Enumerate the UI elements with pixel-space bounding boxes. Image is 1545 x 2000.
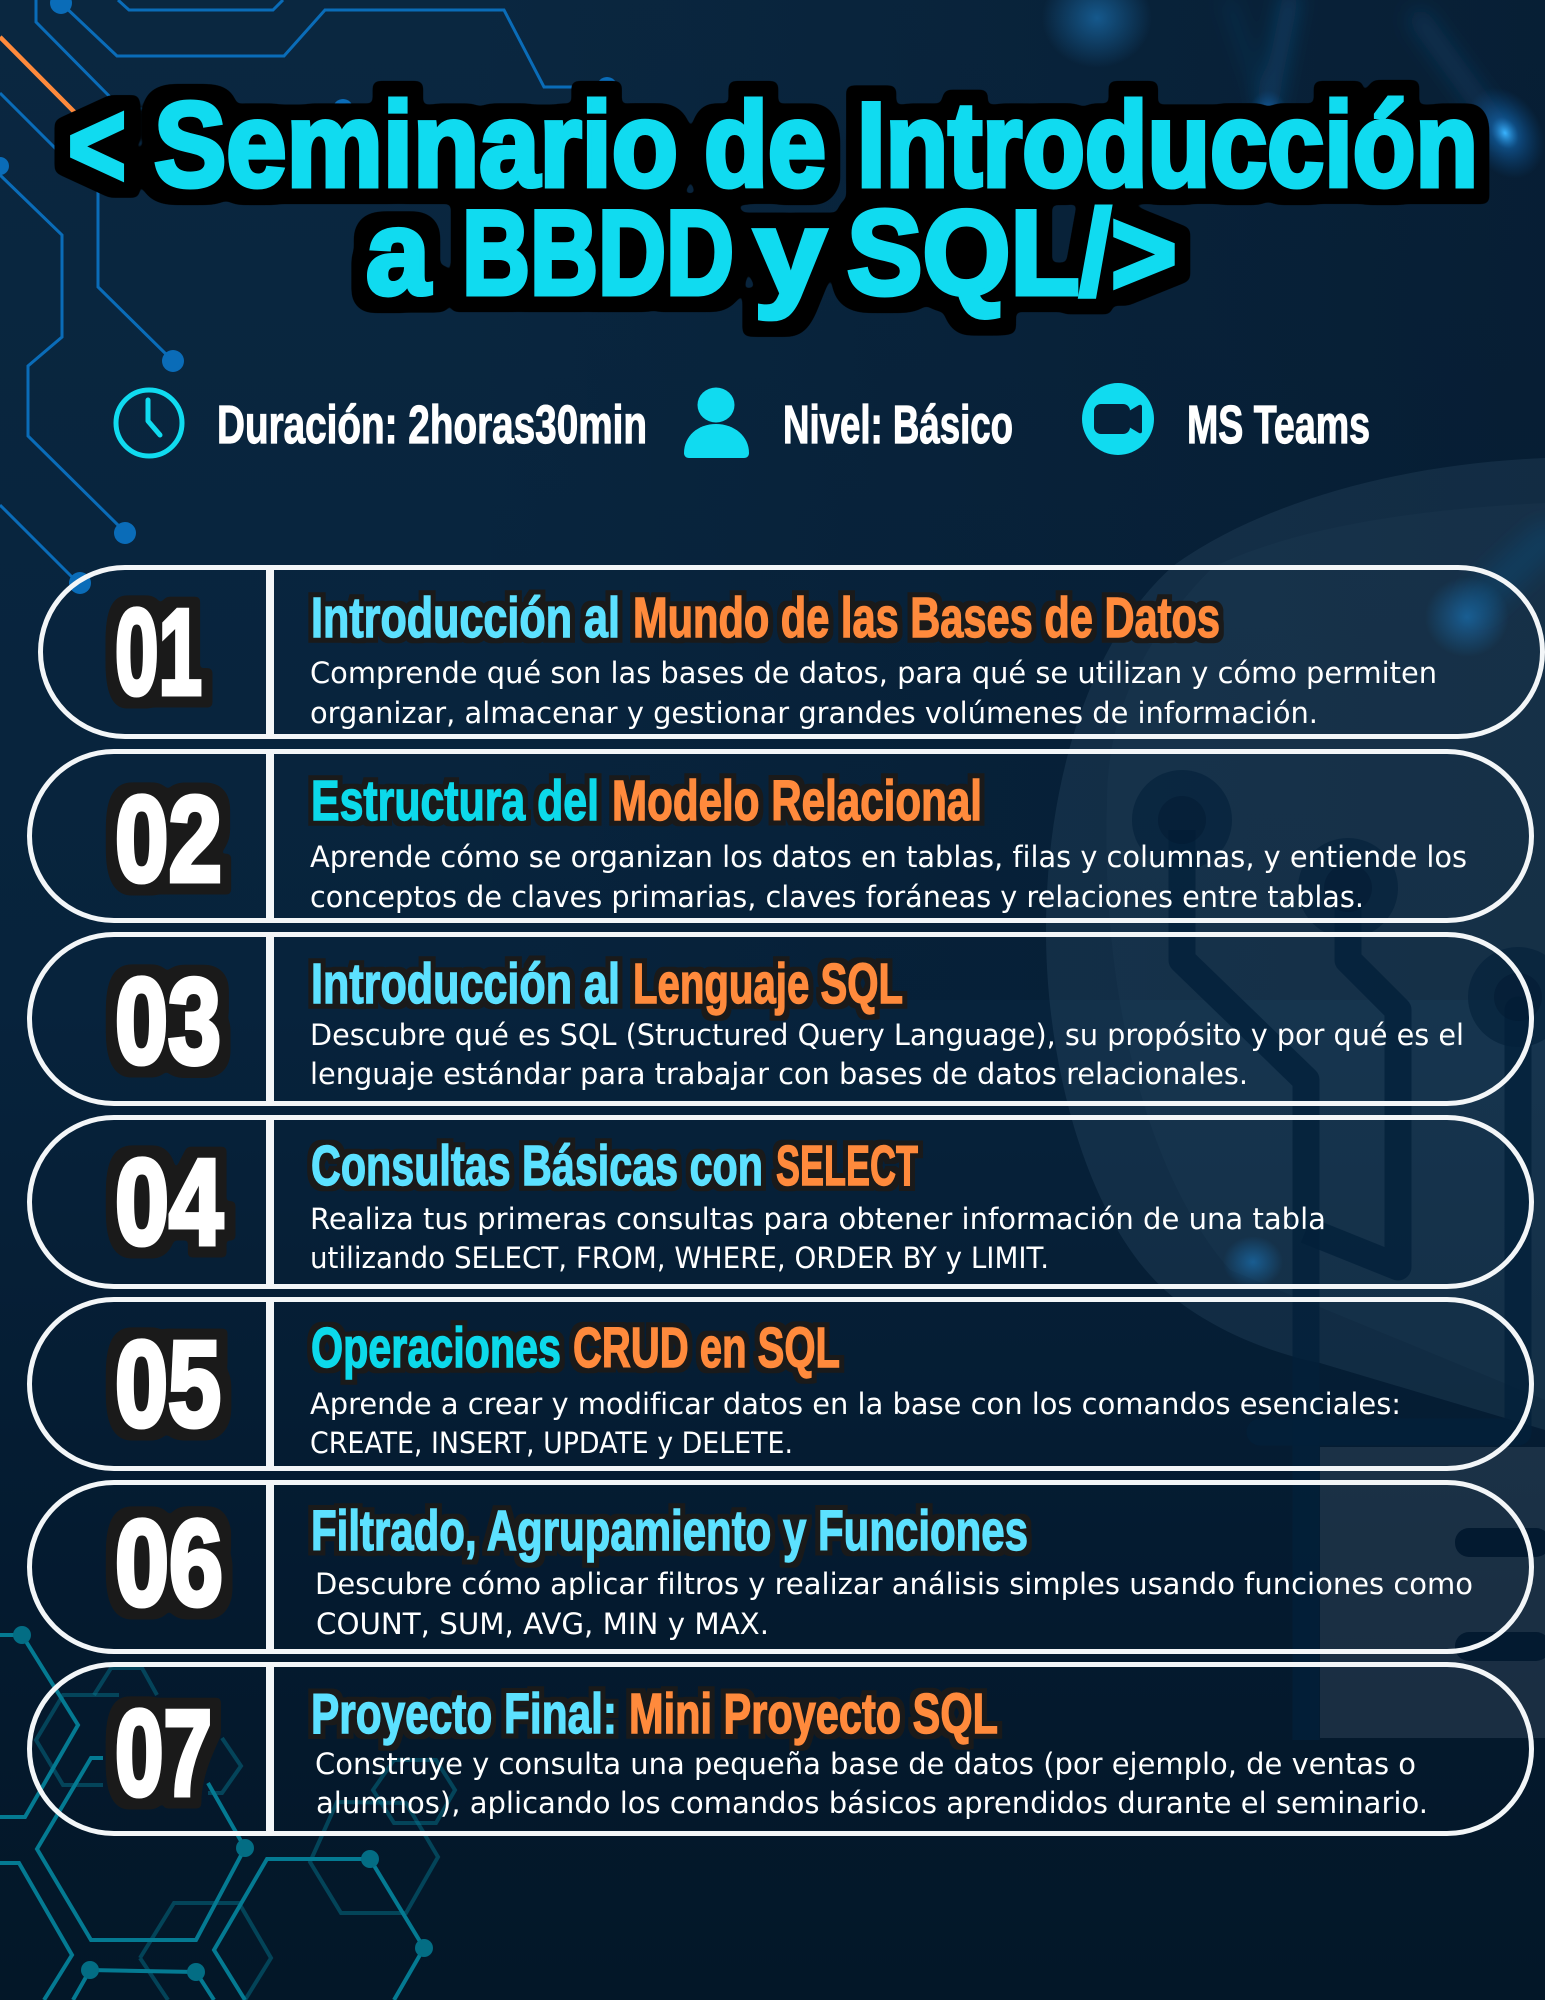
title: a: [366, 186, 431, 320]
title: <: [68, 78, 126, 212]
title: de: [704, 78, 826, 212]
description: Aprende a crear y modificar datos en la base con los comandos esenciales:: [310, 1387, 1401, 1421]
heading: Introducción al: [311, 586, 620, 650]
icon: person: [684, 388, 749, 458]
description: [310, 1018, 1464, 1091]
description: Comprende qué son las bases de datos, para qué se utilizan y cómo permiten: [310, 656, 1437, 690]
heading: Introducción al: [311, 952, 620, 1016]
module 07: [30, 1662, 1532, 1836]
heading: CRUD en SQL: [573, 1316, 840, 1380]
divider: [266, 565, 274, 738]
number: 05: [115, 1316, 221, 1452]
divider: [266, 1297, 274, 1471]
number: 02: [115, 771, 222, 907]
description: Realiza tus primeras consultas para obtener información de una tabla: [310, 1202, 1326, 1236]
module 05: [30, 1297, 1532, 1471]
title: SQL/>: [847, 186, 1177, 320]
number: 07: [115, 1685, 212, 1821]
divider: [266, 1662, 274, 1836]
description: CREATE, INSERT, UPDATE y DELETE.: [310, 1426, 793, 1460]
pill frame: [30, 752, 1532, 920]
hexagon network bottom left: [0, 1626, 455, 2000]
pill frame: [30, 1664, 1532, 1834]
heading: Modelo Relacional: [612, 769, 982, 833]
icon: clock: [116, 390, 182, 456]
pill frame: [40, 568, 1542, 736]
module 03: [30, 932, 1532, 1106]
pill frame: [30, 934, 1532, 1104]
description: [310, 1387, 1401, 1460]
description: [310, 840, 1467, 914]
title: BBDD: [462, 186, 734, 320]
divider: [266, 932, 274, 1106]
heading: SELECT: [776, 1134, 918, 1198]
module 06: [30, 1480, 1532, 1654]
description: Descubre qué es SQL (Structured Query Language), su propósito y por qué es el: [310, 1018, 1464, 1052]
pill frame: [30, 1118, 1532, 1286]
description: conceptos de claves primarias, claves foráneas y relaciones entre tablas.: [310, 880, 1364, 914]
divider: [266, 1115, 274, 1289]
heading: Consultas Básicas con: [311, 1134, 763, 1198]
description: alumnos), aplicando los comandos básicos aprendidos durante el seminario.: [316, 1786, 1428, 1820]
info row: [116, 383, 1370, 458]
number: 01: [115, 584, 202, 720]
heading: [311, 586, 1220, 650]
number: 06: [115, 1495, 223, 1631]
description: utilizando SELECT, FROM, WHERE, ORDER BY y LIMIT.: [310, 1241, 1049, 1275]
heading: [311, 1316, 840, 1380]
heading: Mundo de las Bases de Datos: [633, 586, 1220, 650]
circuit lines top left: [0, 0, 617, 594]
duration label: Duración: 2horas30min: [217, 395, 647, 455]
icon: video camera: [1082, 383, 1154, 455]
heading: Lenguaje SQL: [633, 952, 903, 1016]
level label: Nivel: Básico: [783, 395, 1013, 455]
number: 04: [115, 1134, 223, 1270]
description: [310, 1202, 1326, 1275]
number: 03: [115, 953, 221, 1089]
module 04: [30, 1115, 1532, 1289]
module 01: [40, 565, 1542, 738]
pill frame: [30, 1300, 1532, 1468]
divider: [266, 1480, 274, 1654]
heading: Proyecto Final:: [311, 1682, 617, 1746]
description: Aprende cómo se organizan los datos en tablas, filas y columnas, y entiende los: [310, 840, 1467, 874]
description: [315, 1567, 1473, 1641]
heading: Filtrado, Agrupamiento y Funciones: [311, 1499, 1028, 1563]
module 02: [30, 749, 1532, 923]
title: [68, 78, 1478, 320]
description: Construye y consulta una pequeña base de datos (por ejemplo, de ventas o: [315, 1747, 1416, 1781]
divider: [266, 749, 274, 923]
description: lenguaje estándar para trabajar con bases de datos relacionales.: [310, 1057, 1248, 1091]
description: [310, 656, 1437, 730]
description: [315, 1747, 1428, 1820]
description: Descubre cómo aplicar filtros y realizar análisis simples usando funciones como: [315, 1567, 1473, 1601]
description: COUNT, SUM, AVG, MIN y MAX.: [316, 1607, 769, 1641]
heading: [311, 1682, 998, 1746]
heading: [311, 952, 903, 1016]
title: Seminario: [154, 78, 678, 212]
description: organizar, almacenar y gestionar grandes volúmenes de información.: [310, 696, 1318, 730]
heading: [311, 769, 982, 833]
heading: Estructura del: [311, 769, 599, 833]
platform label: MS Teams: [1187, 395, 1370, 455]
heading: Mini Proyecto SQL: [629, 1682, 998, 1746]
title: y: [754, 186, 826, 320]
pill frame: [30, 1482, 1532, 1652]
heading: Operaciones: [311, 1316, 561, 1380]
